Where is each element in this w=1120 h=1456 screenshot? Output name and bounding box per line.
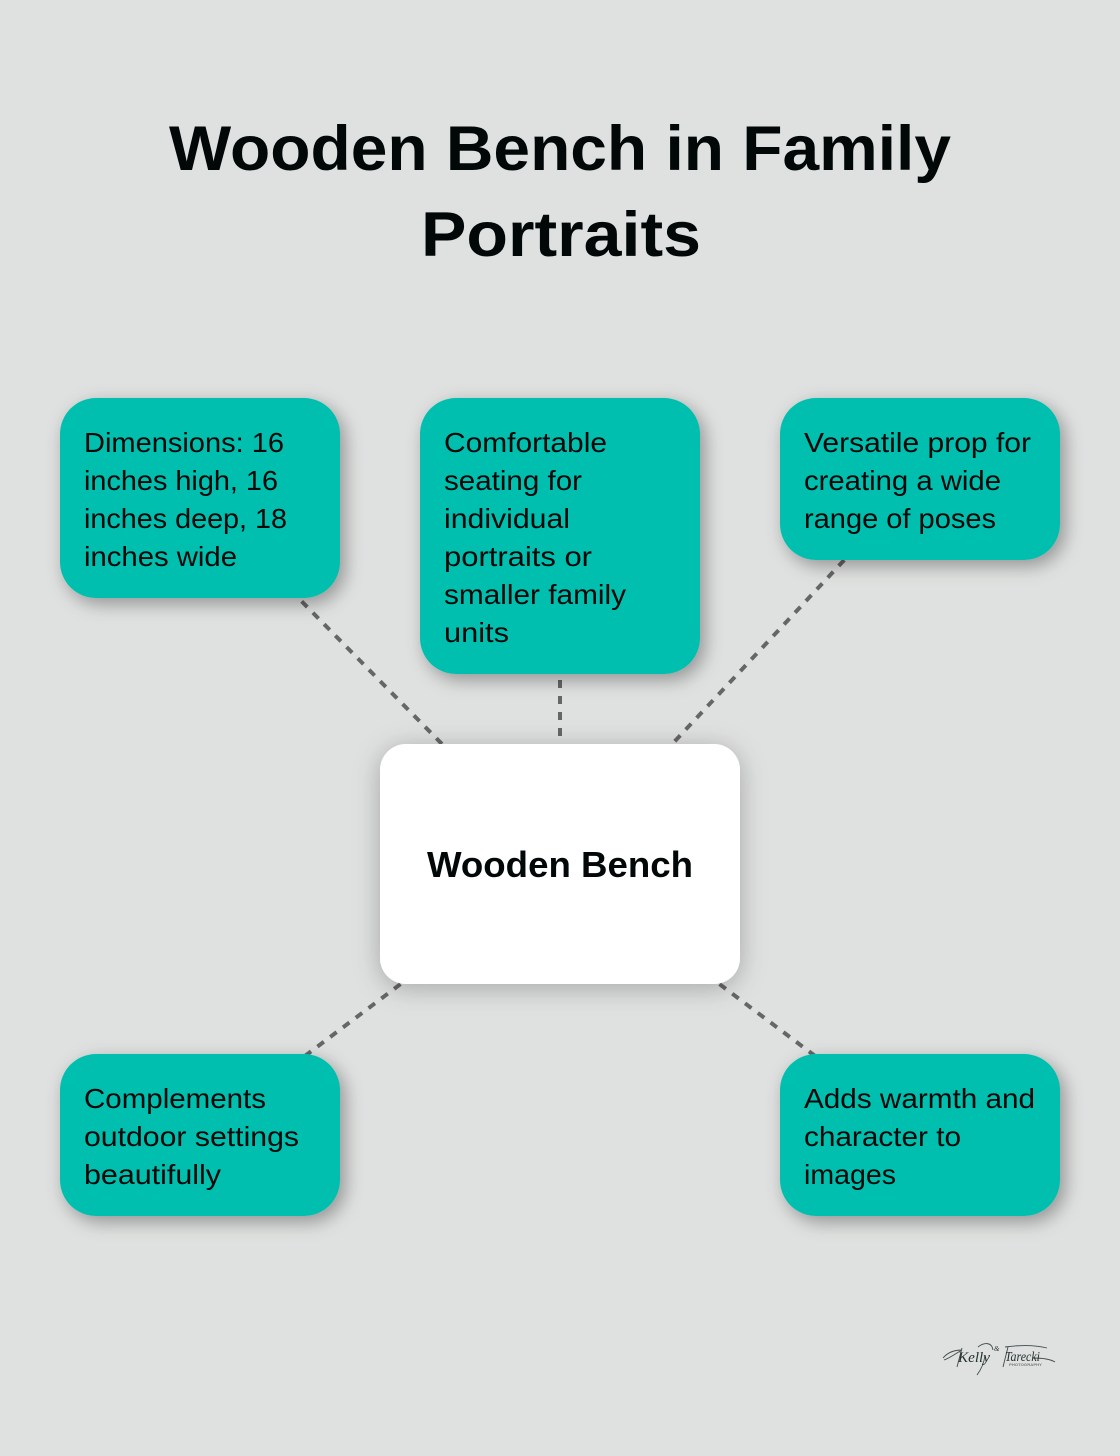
panel: outdoor settings: beautifully	[84, 1159, 221, 1190]
title	[169, 114, 951, 270]
panel: comfortable seating: seating for	[444, 465, 582, 496]
panel: central node: Wooden Bench	[427, 844, 693, 885]
panel: central node	[380, 744, 740, 984]
panel: versatile prop: Versatile prop for	[804, 427, 1031, 458]
panel: dimensions: Dimensions: 16	[84, 427, 284, 458]
logo: signature	[943, 1344, 1055, 1375]
panel: dimensions: inches high, 16	[84, 465, 278, 496]
panel: comfortable seating: Comfortable	[444, 427, 607, 458]
dashed connectors	[200, 479, 920, 1135]
panel: outdoor settings: outdoor settings	[84, 1121, 299, 1152]
panel: dimensions: inches deep, 18	[84, 503, 287, 534]
panel: comfortable seating: units	[444, 617, 509, 648]
title: Portraits	[421, 200, 701, 270]
panel: comfortable seating: portraits or	[444, 541, 592, 572]
panel: warmth and character	[780, 1054, 1060, 1216]
panel: versatile prop: range of poses	[804, 503, 996, 534]
panel: versatile prop: creating a wide	[804, 465, 1001, 496]
logo: signature: Tarecki	[1005, 1350, 1040, 1365]
panel: versatile prop	[780, 398, 1060, 560]
panel: outdoor settings	[60, 1054, 340, 1216]
panel: warmth and character: Adds warmth and	[804, 1083, 1035, 1114]
panel: comfortable seating: smaller family	[444, 579, 626, 610]
panel: dimensions: inches wide	[84, 541, 237, 572]
panel: warmth and character: character to	[804, 1121, 961, 1152]
panel: outdoor settings: Complements	[84, 1083, 266, 1114]
panel: comfortable seating	[420, 398, 700, 674]
logo: signature: &	[994, 1345, 1000, 1353]
panel: comfortable seating: individual	[444, 503, 570, 534]
title: Wooden Bench in Family	[169, 114, 951, 184]
logo: signature: Kelly	[957, 1350, 990, 1366]
panel: warmth and character: images	[804, 1159, 896, 1190]
panel: dimensions	[60, 398, 340, 598]
logo: signature: PHOTOGRAPHY	[1009, 1363, 1043, 1367]
